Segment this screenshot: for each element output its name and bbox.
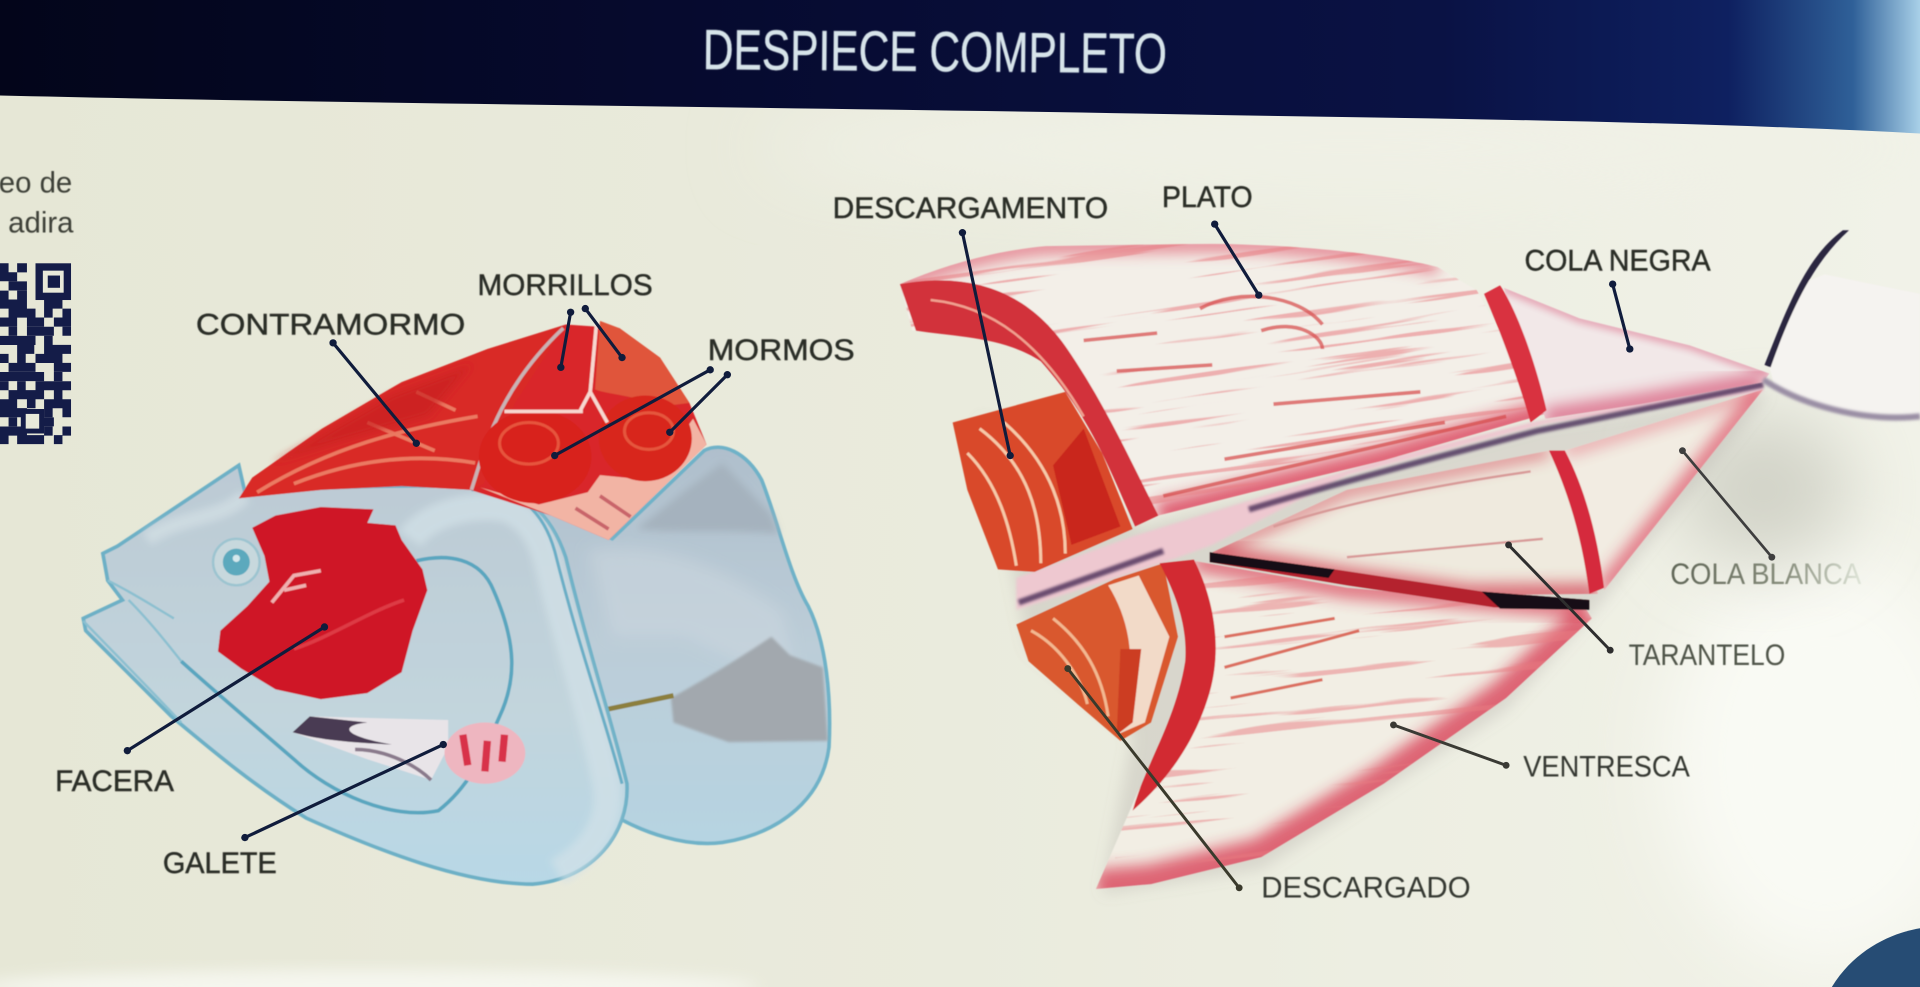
header band — [0, 0, 1920, 134]
descargado block — [1016, 563, 1178, 741]
callout: cola blanca — [1670, 447, 1862, 591]
title: DESPIECE COMPLETO — [703, 18, 1167, 85]
QR code — [0, 267, 71, 440]
red band — [900, 280, 1158, 527]
cola blanca — [1565, 389, 1763, 590]
callout: cola negra — [1524, 245, 1711, 353]
callout: tarantelo: TARANTELO — [1629, 639, 1785, 672]
contramormo muscle — [239, 321, 707, 540]
callout: plato: PLATO — [1162, 181, 1253, 214]
collar band — [410, 507, 607, 872]
callout: contramormo — [196, 308, 465, 447]
back blue body — [539, 447, 830, 843]
side note text — [0, 166, 74, 240]
callout: morrillos: MORRILLOS — [478, 269, 653, 302]
icon: eye — [213, 539, 260, 585]
callout: cola negra: COLA NEGRA — [1524, 245, 1711, 278]
illustration: tuna head — [83, 321, 830, 884]
callout: descargamento — [833, 192, 1108, 459]
callout: tarantelo — [1505, 542, 1785, 672]
callout: contramormo: CONTRAMORMO — [196, 308, 465, 341]
cola negra — [1484, 285, 1769, 422]
shadow — [980, 392, 1769, 894]
callout: plato — [1162, 181, 1262, 299]
morrillo right — [595, 321, 689, 407]
callout: galete: GALETE — [163, 847, 277, 880]
pale membrane wedge — [480, 419, 707, 540]
callout: mormos: MORMOS — [708, 334, 855, 367]
callout: cola blanca: COLA BLANCA — [1670, 558, 1862, 591]
callout: ventresca — [1390, 722, 1690, 783]
side note text: adira — [8, 207, 74, 240]
tail fin — [1763, 230, 1920, 418]
callout: facera — [55, 623, 328, 798]
illustration: tuna loin cuts — [900, 229, 1920, 894]
mormo left — [479, 410, 591, 503]
central pink gap — [1016, 380, 1763, 610]
facera muscle — [218, 507, 427, 699]
ventresca — [1096, 561, 1592, 890]
callout: mormos — [551, 334, 855, 459]
callout: descargado — [1064, 665, 1471, 905]
tarantelo — [1210, 451, 1604, 595]
grey patch — [671, 637, 828, 742]
descargamento block — [953, 392, 1133, 572]
muscle base block — [470, 325, 707, 540]
callout: descargado: DESCARGADO — [1261, 872, 1471, 905]
callout: ventresca: VENTRESCA — [1523, 750, 1690, 783]
callout: descargamento: DESCARGAMENTO — [833, 192, 1108, 225]
callout: facera: FACERA — [55, 765, 174, 798]
callout: galete — [163, 741, 447, 880]
corner disc — [1832, 928, 1920, 987]
plato — [900, 243, 1544, 527]
mormo right — [599, 396, 692, 481]
ventresca red band — [1133, 560, 1216, 811]
front head — [83, 465, 627, 884]
galete — [293, 716, 525, 784]
callout: morrillos — [478, 269, 653, 371]
side note text: eo de — [0, 166, 72, 199]
inner gill line — [181, 558, 512, 813]
black seam — [1210, 552, 1589, 609]
